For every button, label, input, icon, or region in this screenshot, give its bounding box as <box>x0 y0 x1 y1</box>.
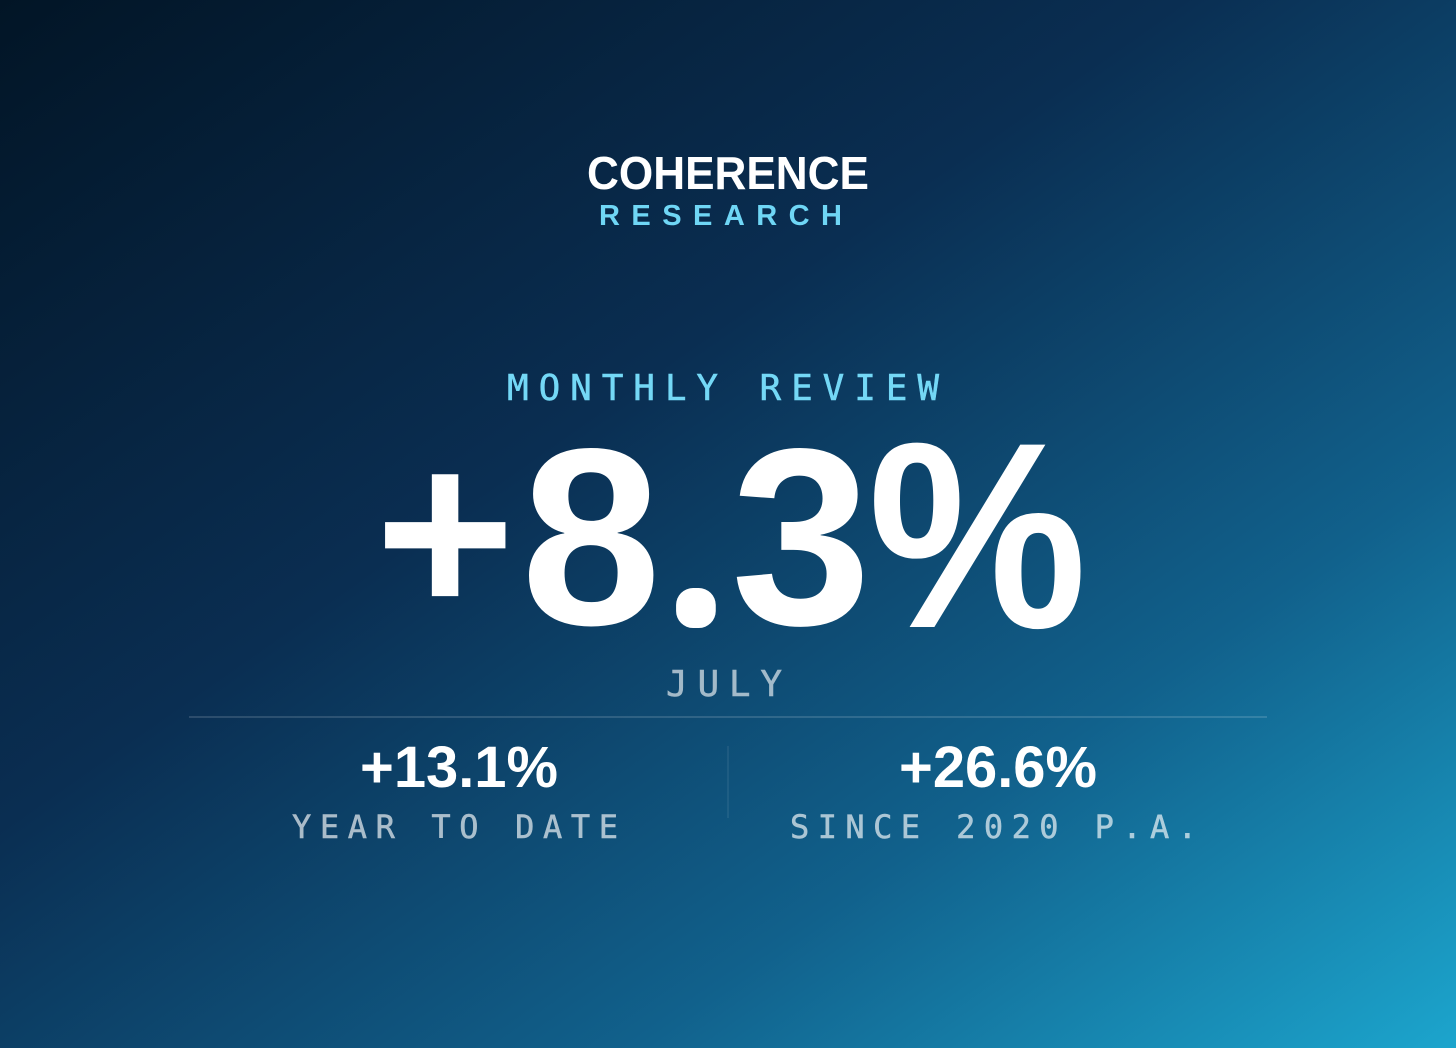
stat label: SINCE 2020 P.A. <box>790 808 1197 846</box>
main figure: . <box>690 576 702 620</box>
main figure: 8 <box>521 397 661 678</box>
main figure <box>375 388 1087 684</box>
stat: year to date <box>292 735 618 846</box>
logo subtitle: RESEARCH <box>599 200 842 232</box>
main figure: % <box>868 388 1087 684</box>
stat label: YEAR TO DATE <box>292 808 618 846</box>
stat: since 2020 per annum <box>790 735 1197 846</box>
logo wordmark: COHERENCE <box>587 147 869 199</box>
stat value: +13.1% <box>360 735 558 800</box>
period label: JULY <box>666 664 782 705</box>
stat value: +26.6% <box>899 735 1097 800</box>
main figure: 3 <box>731 397 871 678</box>
main figure: + <box>375 398 515 666</box>
heading: monthly review: MONTHLY REVIEW <box>507 368 939 409</box>
logo <box>587 147 869 232</box>
